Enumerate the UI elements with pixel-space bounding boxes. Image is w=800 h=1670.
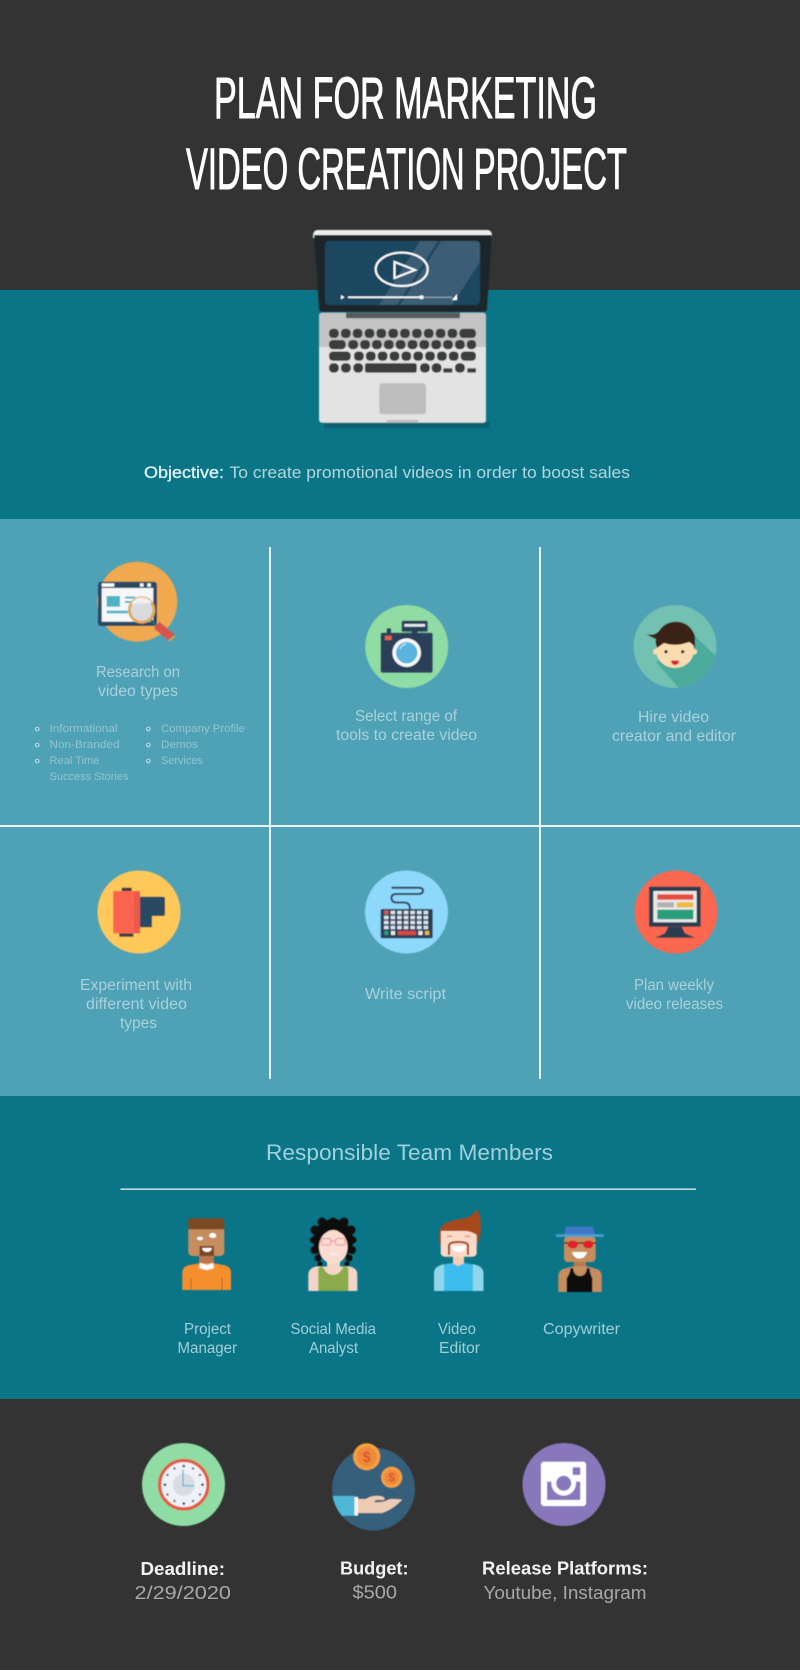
label: deadline: [134, 1559, 231, 1603]
label: write script: Write script: [365, 986, 447, 1003]
task: experiment: [80, 870, 192, 1032]
label: hire: creator and editor: [612, 728, 736, 745]
label: social media analyst: [290, 1321, 376, 1357]
icon: camera: [365, 605, 448, 688]
grid divider: second vertical line: [539, 547, 541, 1079]
icon: laptop with video player: [313, 230, 492, 428]
title: [186, 66, 627, 202]
icon: instagram: [522, 1443, 606, 1526]
task: hire video creator: [612, 605, 736, 745]
label: experiment: types: [120, 1015, 157, 1032]
icon: monitor: [634, 870, 718, 954]
panel: tasks grid background: [0, 519, 800, 1096]
label: project manager: [178, 1321, 237, 1357]
label: social media analyst: Social Media: [290, 1321, 376, 1338]
label: plan weekly: Plan weekly: [634, 977, 714, 994]
heading: responsible team members: Responsible Team Members: [266, 1140, 553, 1165]
avatar: social media analyst: [308, 1218, 357, 1291]
label: video editor: [438, 1321, 480, 1357]
label: deadline: Deadline:: [140, 1559, 225, 1579]
bullet list: video types: Success Stories: [50, 771, 129, 783]
footer item: release platforms: [482, 1443, 648, 1603]
team member: video editor: [434, 1209, 484, 1357]
label: research: Research on: [96, 664, 180, 681]
avatar: video editor: [434, 1209, 484, 1291]
grid divider: first vertical line: [269, 547, 271, 1079]
panel: objective teal band: [0, 290, 800, 519]
icon: hand with coins: [330, 1443, 415, 1530]
objective text: Objective:: [144, 463, 224, 482]
label: social media analyst: Analyst: [309, 1340, 359, 1357]
label: copywriter: Copywriter: [543, 1321, 620, 1338]
label: select tools: [336, 708, 477, 744]
bullet list: video types: Informational: [50, 723, 118, 735]
panel: team members band: [0, 1096, 800, 1399]
label: project manager: Project: [184, 1321, 232, 1338]
objective text: To create promotional videos in order to boost sales: [230, 463, 630, 482]
label: select tools: Select range of: [355, 708, 458, 725]
avatar: project manager: [182, 1218, 231, 1290]
team member: social media analyst: [290, 1218, 376, 1357]
bullet list: video types: Demos: [161, 739, 199, 751]
label: release platforms: [482, 1558, 648, 1603]
team heading divider: [120, 1188, 696, 1190]
label: hire: [612, 709, 736, 745]
bullet list: video types: Non-Branded: [50, 739, 120, 751]
label: research: [96, 664, 180, 700]
icon: film roll: [98, 870, 180, 954]
panel: footer dark band: [0, 1399, 800, 1670]
label: deadline: 2/29/2020: [134, 1583, 231, 1603]
label: video editor: Video: [438, 1321, 476, 1338]
label: plan weekly: [626, 977, 723, 1013]
label: release platforms: Release Platforms:: [482, 1558, 648, 1578]
avatar: copywriter: [556, 1226, 604, 1292]
label: experiment: different video: [86, 996, 187, 1013]
label: research: video types: [98, 683, 178, 700]
bullet list: video types: Services: [161, 755, 203, 767]
icon: browser with magnifier: [97, 562, 177, 642]
task: plan weekly releases: [626, 870, 723, 1013]
grid divider: horizontal line: [0, 825, 800, 827]
task: select tools: [336, 605, 477, 744]
bullet list: video types: [35, 723, 245, 783]
label: hire: Hire video: [638, 709, 709, 726]
icon: hand with coins: $: [363, 1449, 372, 1466]
label: experiment: Experiment with: [80, 977, 192, 994]
label: experiment: [80, 977, 192, 1032]
icon: young man face: [633, 604, 717, 688]
team member: copywriter: [543, 1226, 620, 1338]
label: project manager: Manager: [178, 1340, 237, 1357]
label: plan weekly: video releases: [626, 996, 723, 1013]
label: select tools: tools to create video: [336, 727, 477, 744]
icon: keyboard: [365, 870, 448, 954]
label: release platforms: Youtube, Instagram: [484, 1583, 646, 1603]
label: budget: $500: [352, 1582, 397, 1602]
footer item: budget: [330, 1443, 415, 1602]
label: video editor: Editor: [439, 1340, 480, 1357]
task: research on video types: [35, 562, 245, 783]
label: budget: [340, 1558, 408, 1602]
team member: project manager: [178, 1218, 237, 1357]
task: write script: [365, 870, 448, 1003]
bullet list: video types: Real Time: [50, 755, 100, 767]
panel: dark header background: [0, 0, 800, 290]
footer item: deadline: [134, 1443, 231, 1603]
label: budget: Budget:: [340, 1558, 408, 1578]
icon: hand with coins: $: [388, 1470, 395, 1484]
bullet list: video types: Company Profile: [161, 723, 245, 735]
icon: clock: [142, 1443, 225, 1526]
